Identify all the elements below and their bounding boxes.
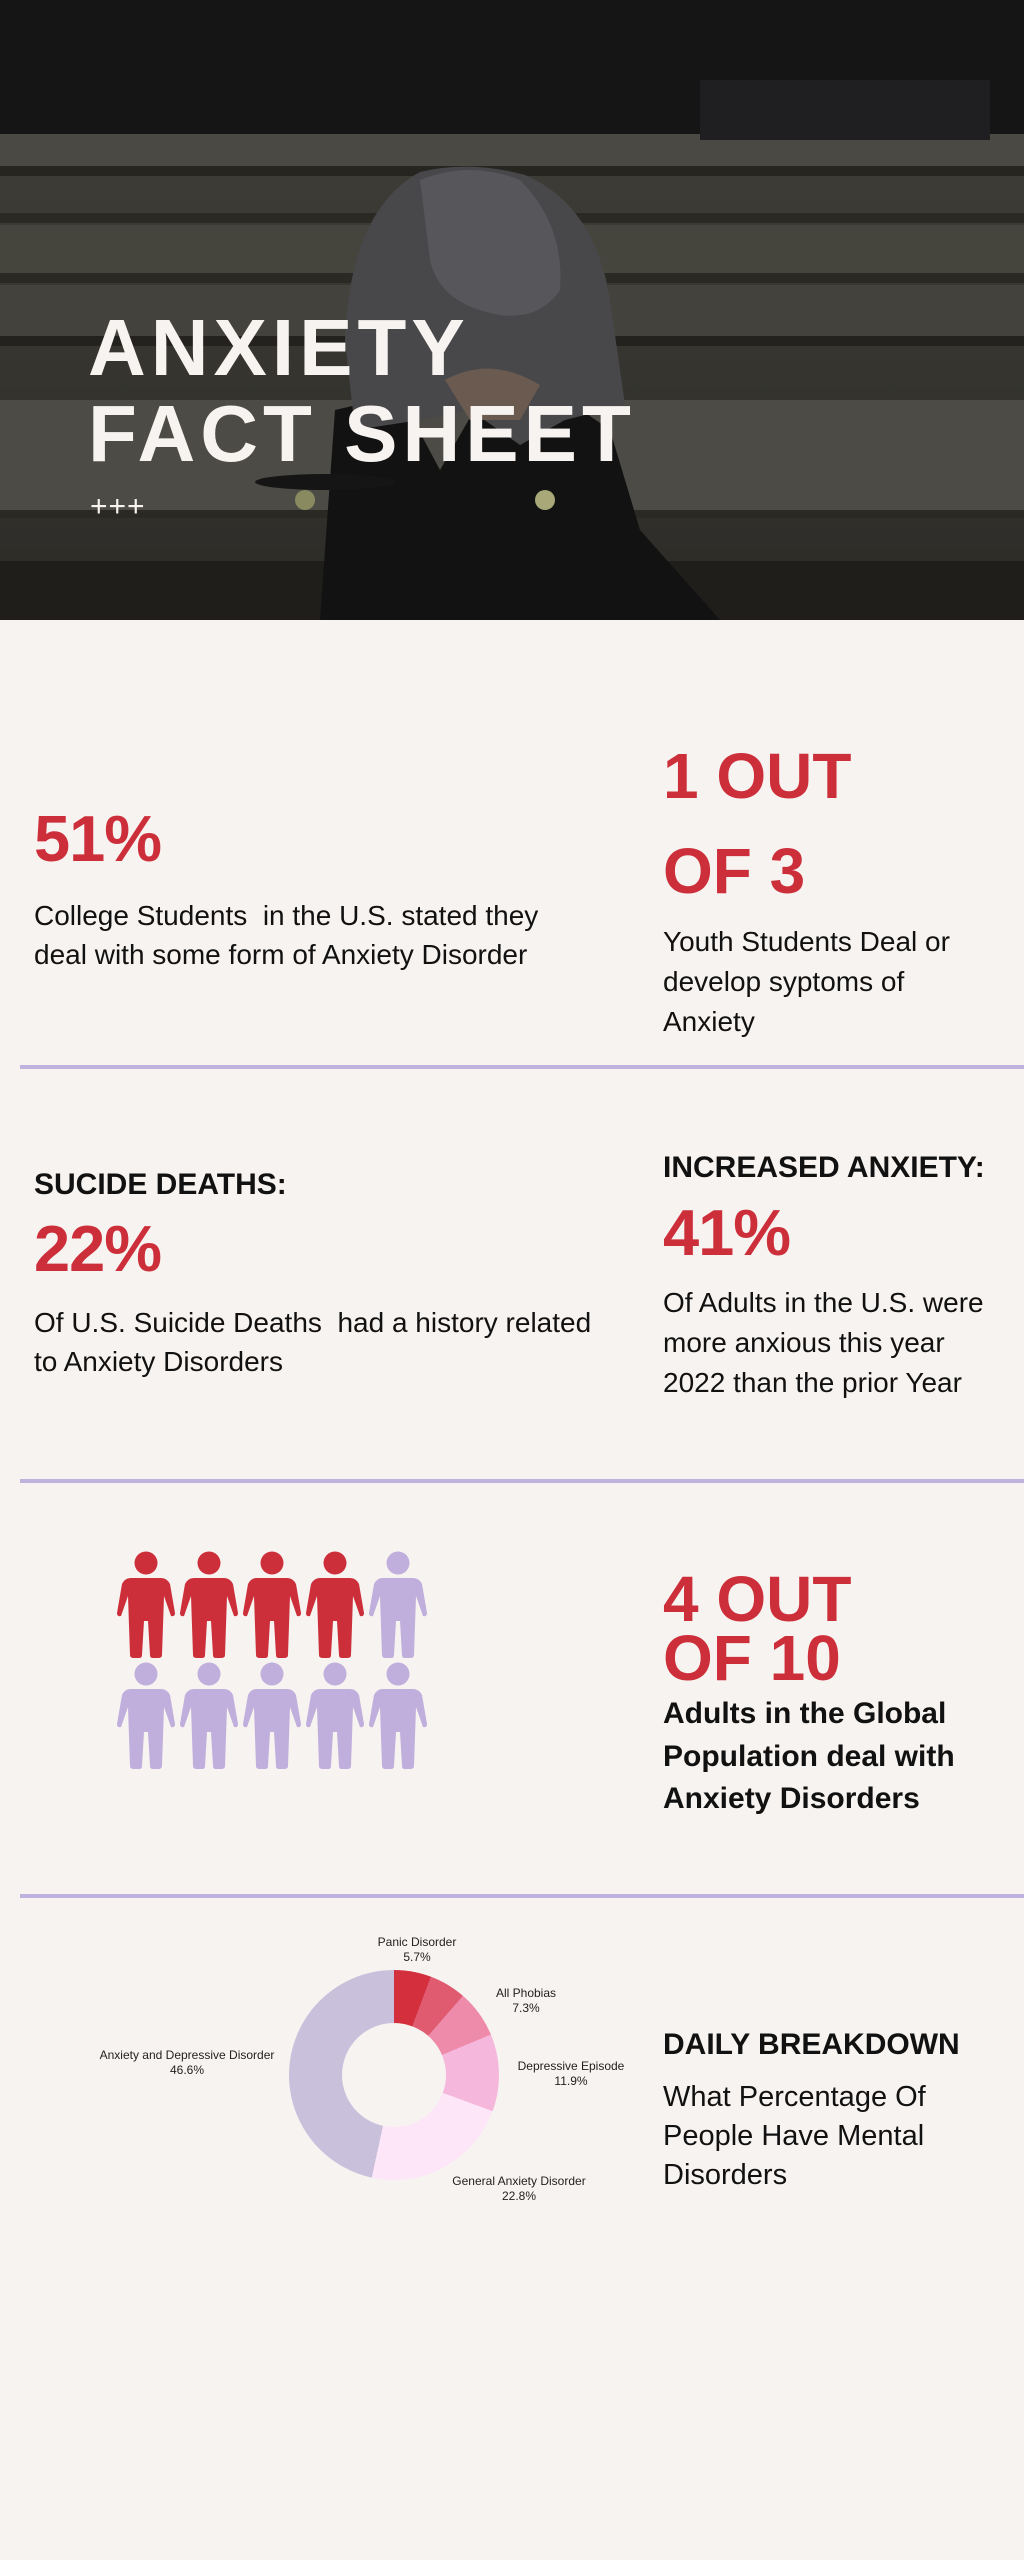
stat: 51% college students <box>34 802 538 970</box>
stat: increased anxiety 41%: 41% <box>663 1196 790 1269</box>
title: ANXIETY <box>88 303 470 392</box>
stat: 51% college students: deal with some form of Anxiety Disorder <box>34 939 527 970</box>
stat: suicide deaths 22% <box>34 1168 591 1377</box>
stat: 1 out of 3: Anxiety <box>663 1006 755 1037</box>
daily breakdown text: Disorders <box>663 2159 787 2191</box>
stat: increased anxiety 41%: Of Adults in the U.S. were <box>663 1287 984 1318</box>
donut chart: Anxiety and Depressive Disorder <box>100 2048 274 2062</box>
donut chart: 46.6% <box>170 2063 204 2077</box>
donut chart: All Phobias <box>496 1986 556 2000</box>
stat: 1 out of 3: OF 3 <box>663 835 805 907</box>
donut chart: 5.7% <box>403 1950 431 1964</box>
stat: 4 out of 10: Adults in the Global <box>663 1697 946 1730</box>
stat: suicide deaths 22%: to Anxiety Disorders <box>34 1346 283 1377</box>
stat: 4 out of 10 <box>663 1563 955 1815</box>
title: FACT SHEET <box>88 389 636 478</box>
stat: 4 out of 10: Anxiety Disorders <box>663 1782 920 1815</box>
stat: 1 out of 3 <box>663 740 950 1037</box>
donut chart: Panic Disorder <box>378 1935 456 1949</box>
decoration: plus signs: +++ <box>90 490 146 523</box>
hero photo <box>0 0 1024 620</box>
stat: increased anxiety 41%: INCREASED ANXIETY: <box>663 1151 985 1184</box>
daily breakdown text: People Have Mental <box>663 2120 924 2152</box>
stat: suicide deaths 22%: Of U.S. Suicide Deaths had a history related <box>34 1307 591 1338</box>
stat: 4 out of 10: Population deal with <box>663 1740 955 1772</box>
stat: 1 out of 3: Youth Students Deal or <box>663 926 950 957</box>
donut chart: General Anxiety Disorder <box>452 2174 586 2188</box>
stat: suicide deaths 22%: 22% <box>34 1212 161 1285</box>
pictogram: 4 of 10 people <box>117 1552 427 1769</box>
stat: 51% college students: College Students in the U.S. stated they <box>34 900 538 931</box>
daily breakdown text <box>663 2028 960 2191</box>
stat: increased anxiety 41% <box>663 1151 985 1398</box>
stat: 4 out of 10: 4 OUT <box>663 1563 851 1635</box>
stat: increased anxiety 41%: 2022 than the prior Year <box>663 1367 962 1398</box>
stat: 51% college students: 51% <box>34 802 161 875</box>
donut chart: 22.8% <box>502 2189 536 2203</box>
stat: 1 out of 3: 1 OUT <box>663 740 851 812</box>
stat: 1 out of 3: develop syptoms of <box>663 966 904 997</box>
person <box>255 167 720 620</box>
stat: increased anxiety 41%: more anxious this year <box>663 1327 945 1358</box>
daily breakdown text: DAILY BREAKDOWN <box>663 2028 960 2061</box>
donut chart: 7.3% <box>512 2001 540 2015</box>
daily breakdown text: What Percentage Of <box>663 2081 926 2113</box>
title <box>88 303 636 478</box>
stat: suicide deaths 22%: SUCIDE DEATHS: <box>34 1168 287 1201</box>
stat: 4 out of 10: OF 10 <box>663 1622 841 1694</box>
donut chart: Depressive Episode <box>518 2059 624 2073</box>
donut chart <box>100 1935 624 2203</box>
donut chart: 11.9% <box>554 2074 588 2088</box>
